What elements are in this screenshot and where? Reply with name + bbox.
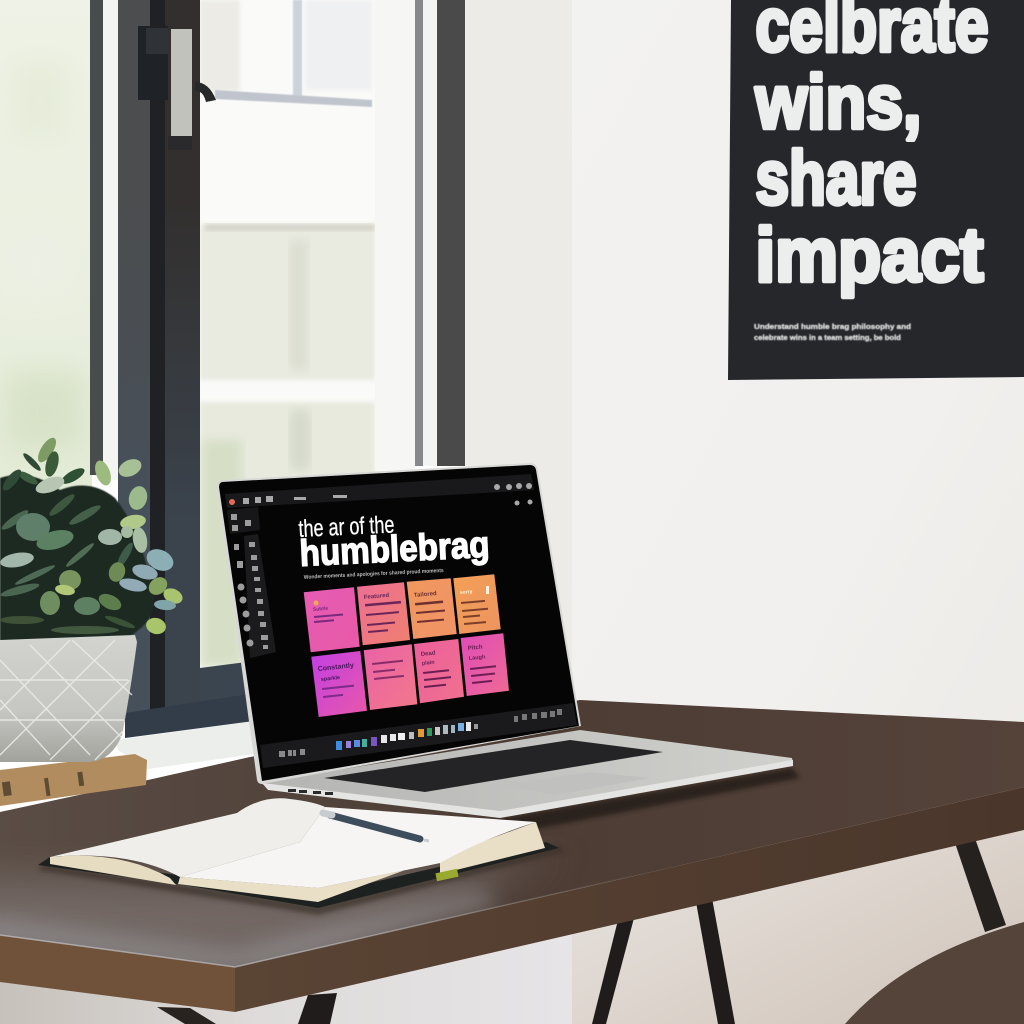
top toolbar xyxy=(225,474,534,508)
card 4 xyxy=(453,574,501,634)
white mullion xyxy=(103,0,118,480)
inner white jamb xyxy=(375,0,415,470)
poster small print: celebrate wins in a team setting, be bold xyxy=(754,333,901,342)
card 7: plain xyxy=(422,660,436,667)
dark sash xyxy=(150,0,200,712)
bottom sash rail xyxy=(200,660,262,703)
poster small print xyxy=(754,322,911,342)
handle upper block xyxy=(146,28,168,54)
poster headline: wins, xyxy=(755,60,922,145)
keyboard xyxy=(324,740,663,792)
laptop xyxy=(217,463,800,832)
left sidebar xyxy=(227,507,276,658)
wall xyxy=(465,0,1024,1024)
sidebar top panel xyxy=(227,507,260,534)
wall below table right xyxy=(572,800,1024,1024)
left page edge xyxy=(50,856,176,885)
screen heading xyxy=(298,507,491,581)
poster headline xyxy=(755,0,988,298)
card 6 xyxy=(364,644,417,710)
poster small print: Understand humble brag philosophy and xyxy=(754,322,911,331)
card 5 xyxy=(311,651,367,717)
poster board xyxy=(728,0,1024,380)
dark leaves xyxy=(0,451,136,634)
sidebar icons xyxy=(231,514,268,649)
garden blur in left pane xyxy=(0,60,85,450)
chair xyxy=(845,922,1024,1024)
poster xyxy=(728,0,1024,380)
poster headline: share xyxy=(756,136,916,221)
foliage mass xyxy=(0,475,154,642)
outer frame left xyxy=(90,0,103,475)
table side edge xyxy=(235,787,1024,1012)
right page xyxy=(180,807,536,888)
card 7: Dead xyxy=(421,650,436,658)
wooden book xyxy=(0,754,147,806)
main glass xyxy=(198,0,418,680)
table edge highlight xyxy=(0,872,650,967)
poster headline: impact xyxy=(756,213,984,298)
handle base xyxy=(168,136,192,150)
handle bracket xyxy=(138,26,168,100)
right leg xyxy=(952,830,1006,932)
center leg right xyxy=(696,898,735,1024)
handle latch xyxy=(195,82,216,102)
bottom frame xyxy=(125,692,262,738)
laptop lid xyxy=(217,463,581,784)
pen xyxy=(323,813,429,841)
dock bar xyxy=(260,703,577,768)
grey jamb strip xyxy=(415,0,423,466)
table grey reflection xyxy=(0,862,532,967)
card 2 xyxy=(357,582,410,645)
card 5: sparkle xyxy=(321,675,340,683)
card 1: Subtle xyxy=(313,606,329,613)
wall below table left xyxy=(0,900,572,1024)
plant xyxy=(0,435,185,642)
notebook xyxy=(38,798,565,915)
grey mullion xyxy=(118,0,150,720)
white jamb strip xyxy=(423,0,437,466)
laptop base xyxy=(260,730,793,812)
book spine xyxy=(0,754,147,806)
notebook cover xyxy=(38,842,559,908)
light leaves xyxy=(0,435,185,636)
base front edge xyxy=(262,760,793,818)
screen heading: humblebrag xyxy=(299,524,490,574)
table legs xyxy=(157,830,1006,1024)
table top xyxy=(0,700,1024,967)
book print xyxy=(2,772,84,796)
card 3: Tailored xyxy=(414,591,437,599)
wall recess shade xyxy=(465,0,572,860)
card 7 xyxy=(414,639,464,703)
ports xyxy=(288,789,333,795)
card 2: Featured xyxy=(364,593,390,601)
notebook shadow xyxy=(38,846,565,915)
card 3 xyxy=(407,578,457,639)
right dark frame xyxy=(437,0,465,466)
card 4: sorry xyxy=(460,589,473,596)
screen heading: Wonder moments and apologies for shared proud moments xyxy=(304,568,444,581)
sidebar long panel xyxy=(244,534,276,658)
pot facets xyxy=(0,640,132,760)
page block front xyxy=(178,822,545,902)
lid bezel xyxy=(219,465,579,781)
card 5: Constantly xyxy=(317,662,354,673)
front leg right xyxy=(298,993,337,1024)
card 8: Laugh xyxy=(469,654,486,662)
toolbar icons xyxy=(229,483,532,506)
plant pot xyxy=(0,635,137,762)
window handle xyxy=(138,26,216,150)
card 8 xyxy=(461,633,509,696)
touchpad xyxy=(501,772,650,795)
screen heading: the ar of the xyxy=(298,511,395,543)
front leg left xyxy=(157,1007,216,1024)
laptop shadow xyxy=(494,768,800,832)
window xyxy=(0,0,465,769)
green ribbon xyxy=(435,869,459,881)
left page xyxy=(50,798,325,877)
dock icons xyxy=(279,709,562,757)
card 8: Pitch xyxy=(468,644,483,652)
blurred building beyond the glass xyxy=(200,0,375,667)
handle grip xyxy=(171,29,192,137)
center leg left xyxy=(592,918,634,1024)
toolbar band xyxy=(225,474,534,508)
table xyxy=(0,700,1024,1012)
window sill xyxy=(115,720,262,769)
dark sash groove xyxy=(150,0,165,712)
table front edge xyxy=(0,935,235,1012)
outside left pane xyxy=(0,0,92,745)
pot body xyxy=(0,635,137,762)
card 1 xyxy=(304,587,360,652)
